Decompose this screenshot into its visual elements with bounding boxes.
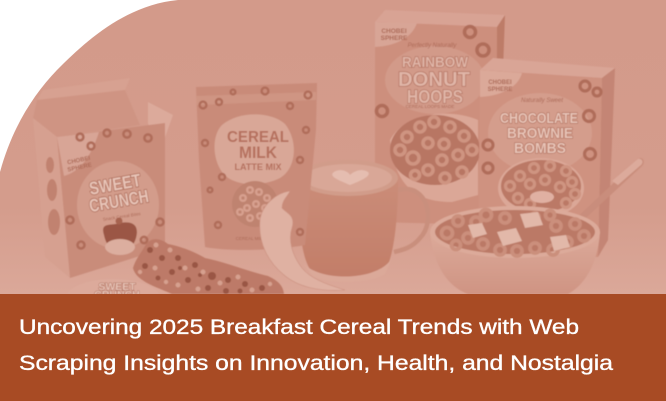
pouch window <box>232 181 278 227</box>
milk splash <box>260 191 345 290</box>
title banner <box>0 294 666 401</box>
cereal bowl on box <box>390 114 478 202</box>
cereal name: BOMBS <box>514 140 566 157</box>
title line 2: Scraping Insights on Innovation, Health, and Nostalgia <box>19 352 613 375</box>
cereal box: chocolate brownie bombs <box>478 58 615 257</box>
cereal name <box>398 54 470 107</box>
open cereal box: sweet crunch <box>33 78 173 278</box>
cereal milk pouch: LATTE MIX <box>234 162 282 172</box>
cereal box: rainbow donut hoops <box>375 10 505 225</box>
cereal milk pouch: CEREAL <box>227 129 289 146</box>
cereal name <box>85 169 150 216</box>
cereal name: RAINBOW <box>402 54 469 71</box>
glass latte mug <box>298 160 428 282</box>
cereal box: chocolate brownie bombs: SPHERE <box>488 87 512 93</box>
cereal name: CRUNCH <box>88 186 150 216</box>
open cereal box: sweet crunch: Snack Cereal Bites <box>102 211 142 222</box>
box side panel <box>46 157 60 235</box>
cereal box: rainbow donut hoops: CHOBEI <box>381 28 407 35</box>
cereal box: chocolate brownie bombs: Naturally Sweet <box>521 98 563 104</box>
cereal box: chocolate brownie bombs: CHOBEI <box>488 80 512 86</box>
cereal box: rainbow donut hoops: SPHERE <box>381 35 408 42</box>
cereal milk pouch: MILK <box>239 143 278 162</box>
title line 1: Uncovering 2025 Breakfast Cereal Trends with Web <box>19 316 579 339</box>
latte art heart <box>332 170 369 185</box>
open cereal box: sweet crunch: SPHERE <box>67 163 92 174</box>
pouch rings <box>200 88 311 235</box>
cereal name: CHOCOLATE <box>500 110 578 127</box>
cereal name <box>500 110 578 157</box>
spoon <box>570 158 644 228</box>
cereal name: DONUT <box>398 69 470 91</box>
granola bar <box>133 239 284 294</box>
cereal disc on table: CRUNCH <box>94 289 140 301</box>
cereal name: SWEET <box>88 170 142 199</box>
cereal disc on table: SWEET <box>98 281 136 293</box>
cereal bowl <box>430 206 600 294</box>
cereal box: rainbow donut hoops: Perfectly Naturally <box>408 43 457 49</box>
cereal name: BROWNIE <box>507 125 573 142</box>
loose rings on box <box>376 26 489 116</box>
pouch label blob <box>214 114 294 184</box>
cereal milk pouch: CEREAL MILK MIX <box>236 236 274 241</box>
marshmallows <box>468 212 570 251</box>
cereal name: HOOPS <box>407 87 463 107</box>
cereal rings <box>442 210 589 256</box>
cereal box: rainbow donut hoops: CEREAL LOOPS MADE <box>406 104 454 109</box>
cereal bowl on box <box>498 158 584 218</box>
product scene <box>33 10 644 317</box>
cereal disc on table <box>66 279 160 317</box>
open cereal box: sweet crunch: CHOBEI <box>67 156 91 166</box>
rounded background panel <box>0 0 666 294</box>
box rings <box>66 130 164 248</box>
cupcake illustration <box>103 222 137 252</box>
cereal milk pouch <box>196 83 317 250</box>
loose rings on box <box>483 81 601 173</box>
